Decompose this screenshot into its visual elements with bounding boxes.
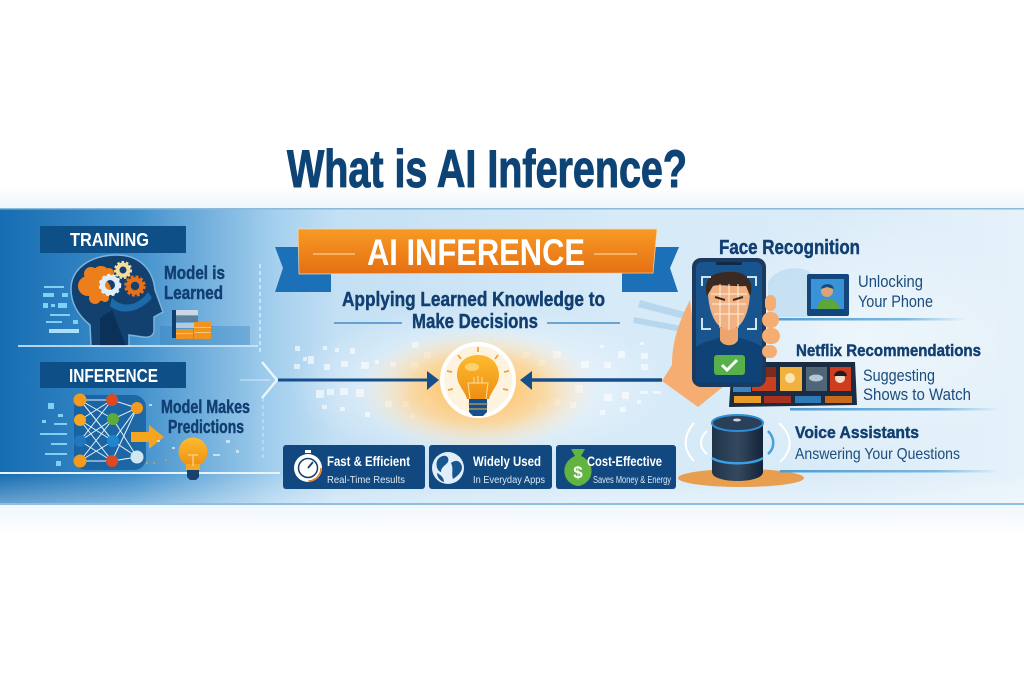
- glow: [358, 328, 598, 452]
- bottom fade: [0, 505, 1024, 533]
- decorative rays to phone: [633, 300, 692, 332]
- icon: money bag: $: [573, 463, 583, 482]
- icon: head with gears: [71, 255, 163, 346]
- subtitle: Applying Learned Knowledge to: [342, 289, 605, 311]
- divider: dashed line with chevron: [240, 264, 277, 458]
- phone person: [696, 272, 762, 383]
- ribbon: right tail: [622, 247, 679, 292]
- card: widely used: Widely Used: [473, 453, 541, 469]
- title backdrop fade: [0, 185, 1024, 208]
- heading: face recognition: Face Recognition: [719, 237, 860, 259]
- text: unlocking your phone: Your Phone: [858, 293, 933, 311]
- text: model makes predictions: Model Makes: [161, 397, 250, 417]
- ribbon: left tail: [275, 247, 331, 292]
- text: model makes predictions: [161, 397, 250, 437]
- panel: main banner: [0, 208, 1024, 505]
- icon: thumbnail face: [807, 274, 849, 316]
- card: fast and efficient: Real-Time Results: [327, 474, 405, 486]
- card: cost-effective: [556, 445, 676, 489]
- heading: netflix recommendations: Netflix Recommendations: [796, 341, 981, 360]
- subtitle: Make Decisions: [412, 311, 538, 333]
- text: model is learned: Learned: [164, 283, 223, 303]
- text: model is learned: [164, 263, 225, 303]
- chart: netflix strip: [729, 362, 857, 407]
- icon: data lines training: [43, 286, 79, 333]
- training label: TRAINING: [70, 230, 149, 250]
- arrow: network to prediction: [131, 425, 164, 449]
- card: cost-effective: Cost-Effective: [587, 453, 662, 469]
- panel: centre: [275, 229, 679, 489]
- icon: smart speaker: [678, 415, 804, 487]
- card: cost-effective: Saves Money & Energy: [593, 475, 671, 486]
- panel: left column: [0, 226, 280, 480]
- icon: small bulb: [178, 438, 208, 480]
- card: widely used: [429, 445, 552, 489]
- decoration behind thumbnail: [768, 268, 810, 317]
- card: widely used: In Everyday Apps: [473, 474, 545, 486]
- card: fast and efficient: [283, 445, 425, 489]
- icon: globe: [432, 452, 464, 484]
- training label: [40, 226, 186, 253]
- subtitle: [342, 289, 605, 333]
- data specks: [146, 404, 239, 464]
- icon: central bulb: [442, 344, 514, 416]
- brain: [78, 266, 114, 304]
- text: unlocking your phone: Unlocking: [858, 273, 923, 291]
- icon: hand and phone: [662, 258, 780, 407]
- icon: stopwatch: [294, 450, 322, 482]
- text: unlocking your phone: [858, 273, 933, 311]
- chart: neural network: [74, 394, 146, 470]
- icon: book stacks: [172, 310, 211, 339]
- text: answering questions: Answering Your Questions: [795, 446, 960, 463]
- banner: AI inference: [298, 229, 657, 274]
- text: suggesting shows: Suggesting: [863, 367, 935, 385]
- card: fast and efficient: Fast & Efficient: [327, 453, 410, 469]
- arrow: right to bulb: [520, 371, 662, 390]
- gears: [100, 262, 144, 296]
- text: suggesting shows: [863, 367, 971, 404]
- decorative shelf: [160, 326, 250, 345]
- data particles: [294, 342, 661, 419]
- title: What is AI Inference?: [287, 140, 687, 199]
- heading: voice assistants: Voice Assistants: [795, 423, 919, 442]
- text: model makes predictions: Predictions: [168, 417, 244, 437]
- banner: AI inference: AI INFERENCE: [367, 232, 585, 273]
- panel: right column: [662, 237, 1000, 487]
- arrow: left to bulb: [278, 371, 439, 390]
- text: suggesting shows: Shows to Watch: [863, 386, 971, 404]
- inference label: INFERENCE: [69, 366, 158, 386]
- icon: data lines inference: [40, 403, 67, 466]
- inference label: [40, 362, 186, 388]
- text: model is learned: Model is: [164, 263, 225, 283]
